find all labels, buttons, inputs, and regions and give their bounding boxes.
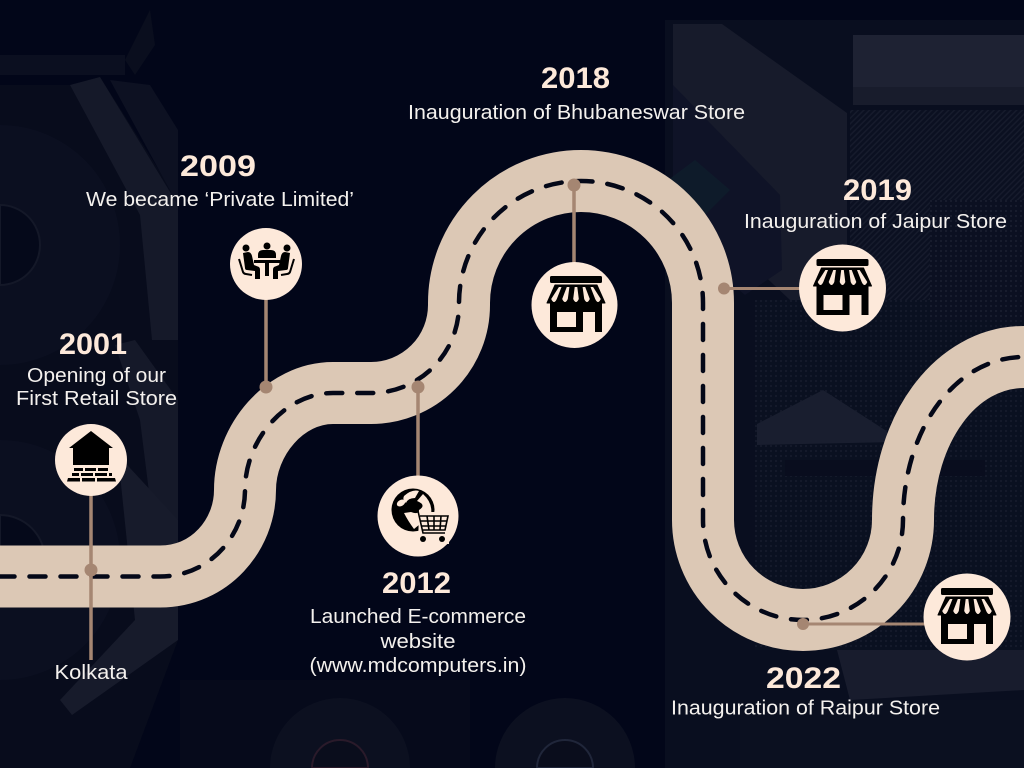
icon circle 2001 <box>55 424 127 496</box>
icon: meeting table <box>239 242 294 279</box>
connector 2018 <box>572 185 576 265</box>
icon circle 2018 <box>532 262 618 348</box>
milestone 2019 <box>718 174 1007 332</box>
location: Kolkata <box>54 661 128 684</box>
year 2012: 2012 <box>382 567 451 600</box>
year 2018: 2018 <box>541 62 610 95</box>
connector 2019 <box>724 287 802 290</box>
milestone 2018 <box>408 62 745 348</box>
marker 2009 <box>260 380 272 394</box>
background: motherboard <box>655 20 1024 768</box>
year 2019: 2019 <box>843 174 912 207</box>
icon circle 2009 <box>230 228 302 300</box>
icon: storefront <box>814 259 872 315</box>
description 2001: First Retail Store <box>16 387 177 410</box>
connector 2022 <box>803 622 940 626</box>
connector 2001 <box>89 490 93 660</box>
icon: storefront <box>938 588 996 644</box>
description 2012: (www.mdcomputers.in) <box>310 654 526 677</box>
milestone 2001 <box>16 328 177 684</box>
marker 2012 <box>412 380 424 394</box>
milestone 2012 <box>310 380 526 677</box>
description 2018: Inauguration of Bhubaneswar Store <box>408 101 745 124</box>
year 2001: 2001 <box>59 328 127 361</box>
marker 2022 <box>797 618 809 630</box>
description 2012: Launched E-commerce <box>310 605 526 628</box>
icon circle 2012 <box>378 476 458 556</box>
marker 2018 <box>568 178 580 192</box>
description 2009: We became ‘Private Limited’ <box>86 188 354 211</box>
marker 2001 <box>84 564 98 576</box>
background: graphics card fans <box>0 10 635 768</box>
description 2019: Inauguration of Jaipur Store <box>744 210 1007 233</box>
road <box>0 181 1024 620</box>
icon: storefront <box>547 276 605 332</box>
year 2022: 2022 <box>766 662 841 695</box>
icon: house on bricks <box>67 431 116 482</box>
icon circle 2022 <box>924 574 1010 660</box>
road centre dashes <box>0 181 1024 620</box>
connector 2009 <box>264 295 268 387</box>
milestone 2022 <box>671 574 1010 720</box>
milestone 2009 <box>86 150 354 394</box>
marker 2019 <box>718 282 730 294</box>
description 2022: Inauguration of Raipur Store <box>671 696 940 720</box>
description 2012: website <box>379 630 456 653</box>
connector 2012 <box>416 387 420 480</box>
icon circle 2019 <box>799 244 886 332</box>
icon: globe and cart <box>392 488 449 544</box>
description 2001: Opening of our <box>27 364 166 387</box>
year 2009: 2009 <box>180 150 256 183</box>
